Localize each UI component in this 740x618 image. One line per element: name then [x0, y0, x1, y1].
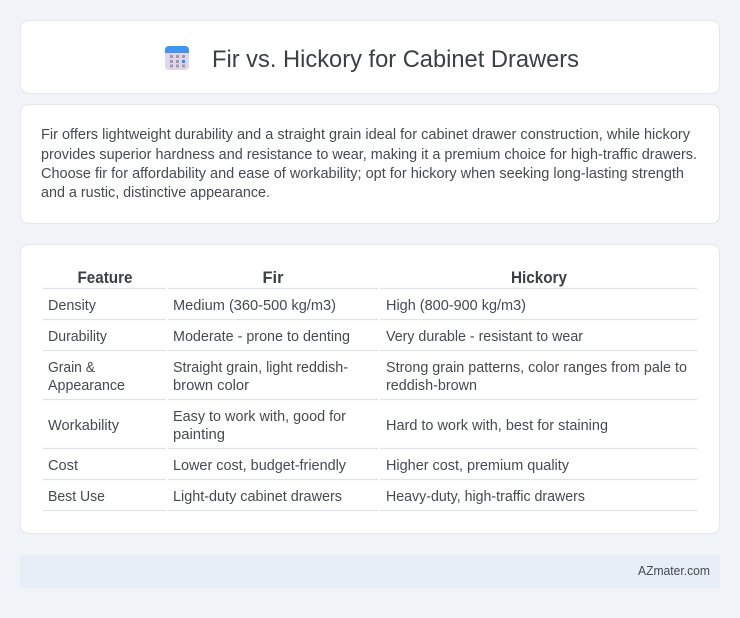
row: grain and appearance: Straight grain, light reddish- — [173, 360, 348, 376]
text block: summary paragraph — [41, 127, 697, 201]
row: workability: Easy to work with, good for — [173, 409, 346, 425]
row: density: Medium (360-500 kg/m3) — [173, 298, 336, 314]
row: grain and appearance — [48, 360, 687, 394]
row: grain and appearance: brown color — [173, 378, 249, 394]
panel: summary — [20, 104, 720, 224]
row: best use — [48, 489, 585, 505]
text block: summary paragraph: Choose fir for affordability and ease of workability; opt for hickory when seeking long-lasting strength — [41, 166, 684, 182]
row: cost: Lower cost, budget-friendly — [173, 458, 347, 474]
icon: calendar — [165, 46, 189, 70]
row: durability — [48, 329, 583, 345]
row: workability — [48, 409, 608, 443]
row: workability: Workability — [48, 418, 120, 434]
row: workability: Hard to work with, best for staining — [386, 418, 608, 434]
text block: summary paragraph: provides superior hardness and resistance to wear, making it a premium choice for high-traffic drawers. — [41, 147, 697, 163]
title: Fir vs. Hickory for Cabinet Drawers — [212, 46, 579, 73]
row: density — [48, 298, 526, 314]
table header: Fir — [263, 269, 284, 287]
row: cost: Cost — [48, 458, 78, 474]
footer credit: AZmater.com — [638, 564, 710, 578]
table header: Hickory — [511, 269, 568, 287]
row: density: High (800-900 kg/m3) — [386, 298, 526, 314]
panel: comparison table — [20, 244, 720, 534]
row: best use: Heavy-duty, high-traffic drawers — [386, 489, 585, 505]
row: durability: Moderate - prone to denting — [173, 329, 350, 345]
row: cost — [48, 458, 570, 474]
row: workability: painting — [173, 427, 225, 443]
row: grain and appearance: reddish-brown — [386, 378, 477, 394]
row: grain and appearance: Strong grain patterns, color ranges from pale to — [386, 360, 687, 376]
table header: Feature — [78, 269, 132, 287]
table header — [78, 269, 568, 287]
panel: title card — [20, 20, 720, 94]
text block: summary paragraph: and a rustic, distinctive appearance. — [41, 185, 270, 201]
footer bar — [20, 555, 720, 588]
row: best use: Best Use — [48, 489, 105, 505]
text block: summary paragraph: Fir offers lightweight durability and a straight grain ideal for cabinet drawer construction, while hickory — [41, 127, 691, 143]
row: cost: Higher cost, premium quality — [386, 458, 570, 474]
row: best use: Light-duty cabinet drawers — [173, 489, 342, 505]
row: grain and appearance: Grain & — [48, 360, 95, 376]
row: grain and appearance: Appearance — [48, 378, 125, 394]
row: durability: Very durable - resistant to wear — [386, 329, 583, 345]
row: durability: Durability — [48, 329, 108, 345]
row: density: Density — [48, 298, 97, 314]
